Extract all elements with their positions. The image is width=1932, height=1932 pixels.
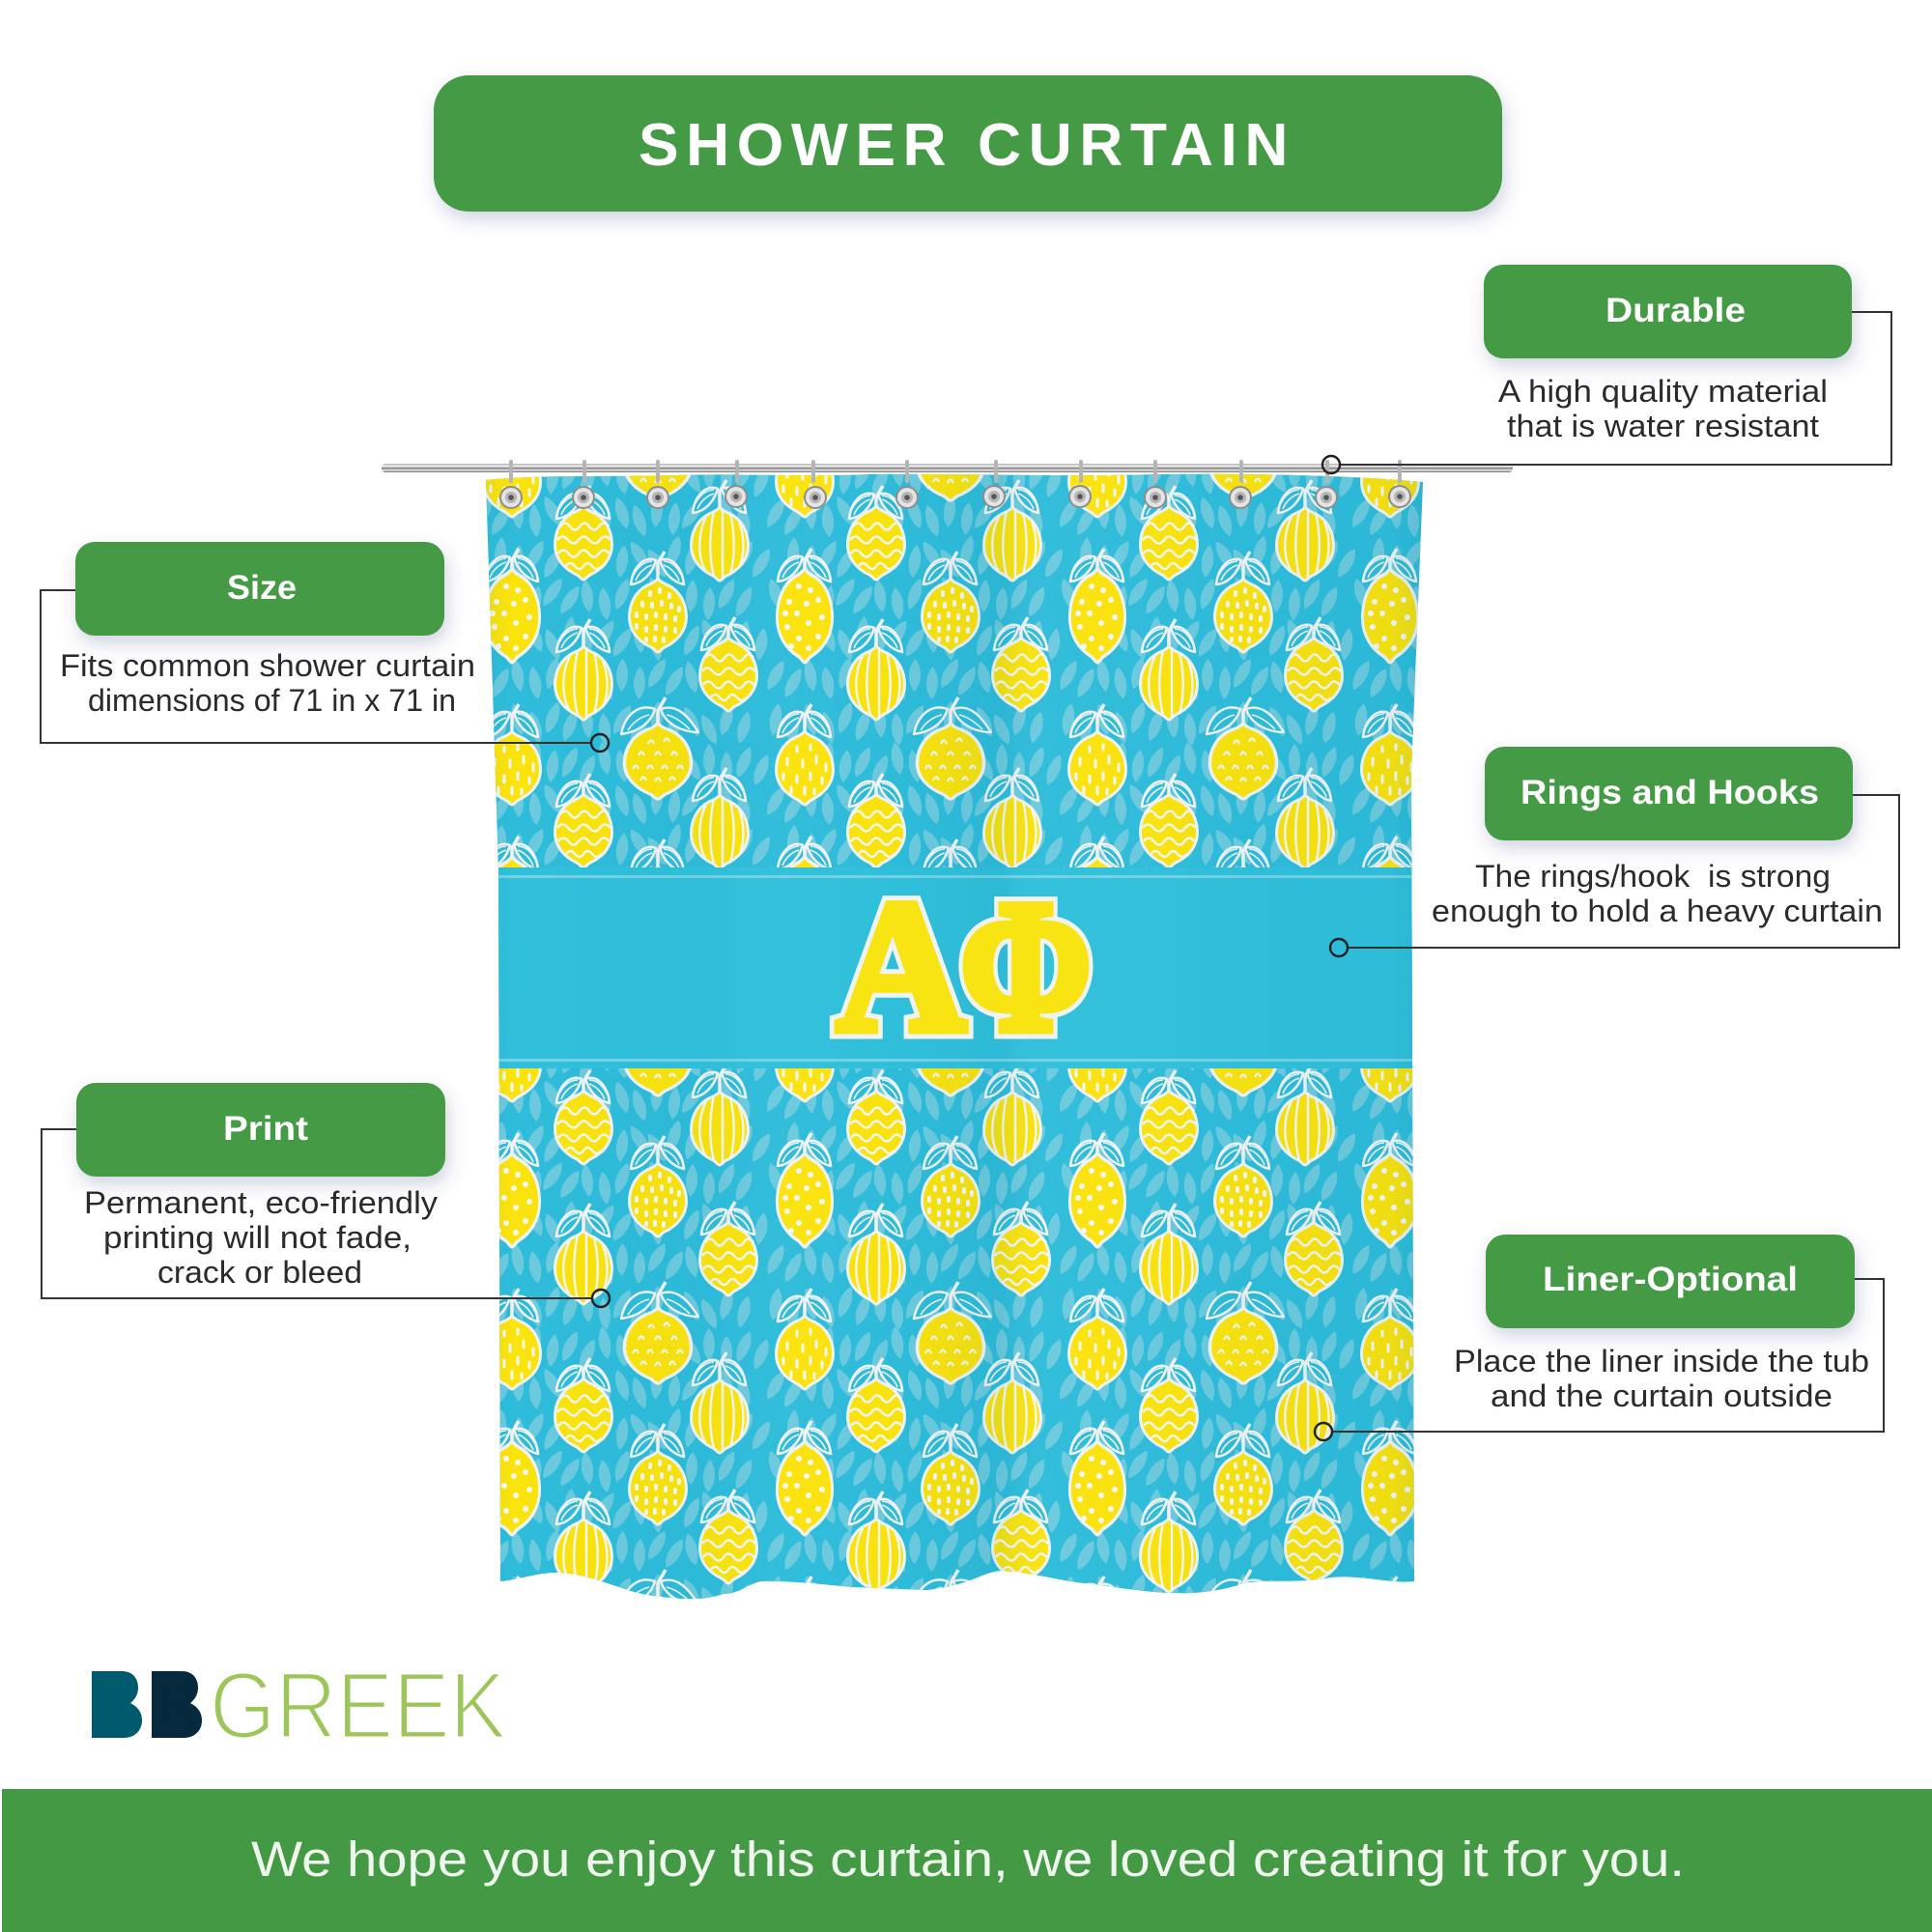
callout: Print (42, 1083, 610, 1307)
logo: BB Greek: GREEK (210, 1653, 506, 1758)
callout: Liner-Optional (1315, 1235, 1884, 1440)
callout: Print: Print (223, 1110, 308, 1148)
callout: Print: crack or bleed (157, 1255, 362, 1290)
callout: Size: dimensions of 71 in x 71 in (88, 683, 456, 718)
footer banner (2, 1789, 1932, 1932)
callout: Size: Size (227, 569, 297, 607)
title banner: SHOWER CURTAIN (639, 112, 1295, 179)
callout: Rings and Hooks: Rings and Hooks (1520, 774, 1819, 811)
Greek letters alpha phi: Α (837, 862, 966, 1071)
callout: Rings and Hooks: enough to hold a heavy curtain (1432, 894, 1883, 928)
callout: Durable: that is water resistant (1507, 409, 1819, 443)
callout: Rings and Hooks (1330, 747, 1899, 956)
Greek letters alpha phi: Α (837, 862, 966, 1071)
shower rod (382, 464, 1513, 472)
logo: BB Greek: B (153, 1658, 195, 1756)
title banner (434, 75, 1502, 212)
callout: Rings and Hooks: The rings/hook is strong (1475, 859, 1831, 894)
curtain fabric and lemon pattern (486, 473, 1423, 1600)
callout: Print: Permanent, eco-friendly (84, 1185, 438, 1220)
Greek letters alpha phi (837, 862, 1092, 1071)
callout: Durable: A high quality material (1498, 374, 1828, 409)
shower curtain (486, 460, 1423, 1600)
Greek letters alpha phi: Φ (960, 862, 1092, 1071)
callout: Size: Fits common shower curtain (60, 648, 475, 683)
logo: BB Greek (92, 1653, 506, 1758)
callout: Liner-Optional: and the curtain outside (1491, 1378, 1833, 1413)
rings and grommets (499, 460, 1411, 509)
callout: Durable (1322, 265, 1891, 473)
logo: BB Greek: B (93, 1658, 135, 1756)
callout: Durable: Durable (1605, 292, 1746, 329)
callout: Print: printing will not fade, (103, 1220, 412, 1255)
footer banner: We hope you enjoy this curtain, we loved creating it for you. (251, 1832, 1685, 1887)
callout: Size (41, 542, 609, 752)
callout: Liner-Optional: Place the liner inside the tub (1454, 1344, 1869, 1378)
Greek letters alpha phi: Φ (960, 862, 1092, 1071)
callout: Liner-Optional: Liner-Optional (1543, 1261, 1798, 1298)
